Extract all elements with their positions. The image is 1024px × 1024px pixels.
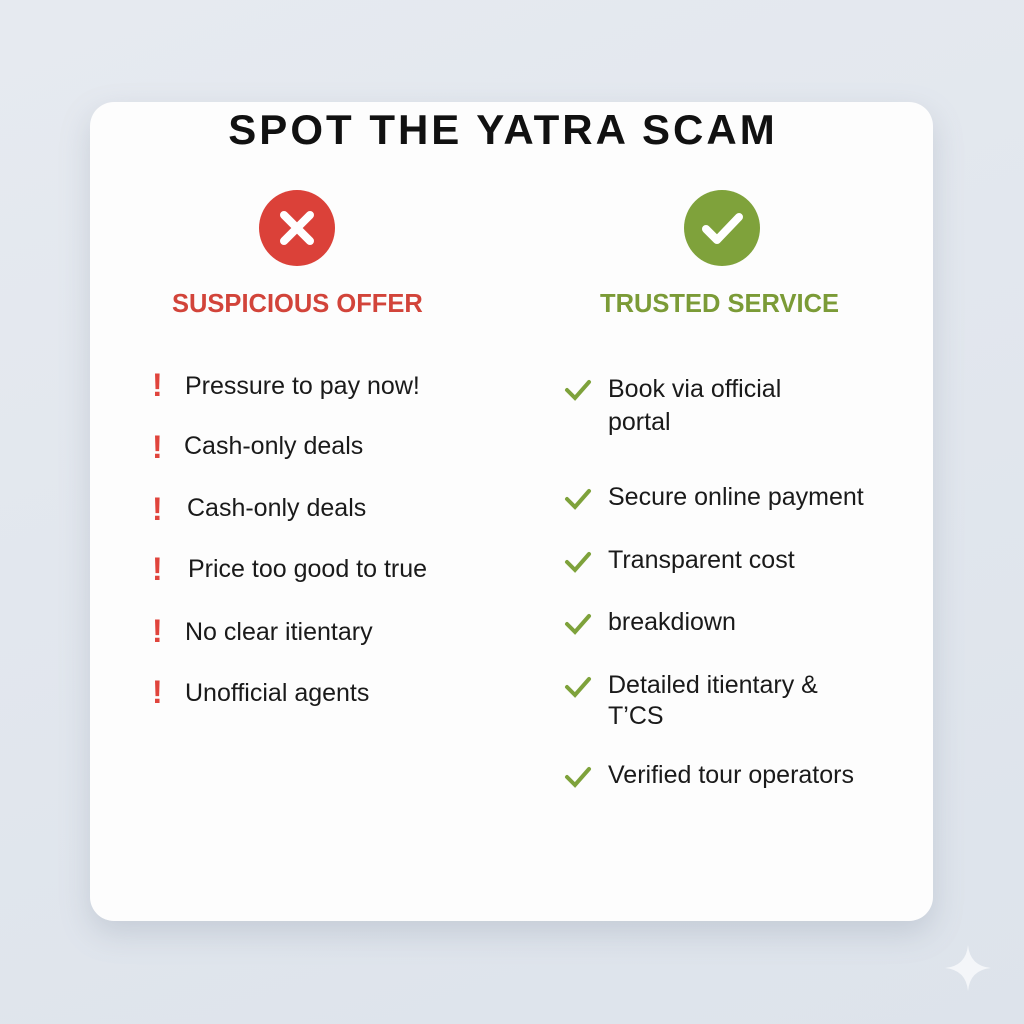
- list: trusted: Secure online payment: [608, 483, 864, 511]
- list: trusted: T’CS: [608, 702, 664, 730]
- list: suspicious: Price too good to true: [188, 555, 427, 583]
- list: suspicious: !: [152, 367, 163, 403]
- list: trusted: Detailed itientary &: [608, 671, 818, 699]
- list: trusted: Verified tour operators: [608, 761, 854, 789]
- list: suspicious: Pressure to pay now!: [185, 372, 420, 400]
- list: suspicious: !: [152, 491, 163, 527]
- list: trusted: portal: [608, 408, 671, 436]
- heading: trusted: TRUSTED SERVICE: [600, 290, 839, 318]
- list: suspicious: Unofficial agents: [185, 679, 369, 707]
- list: suspicious: !: [152, 429, 163, 465]
- icon: red x: [259, 190, 335, 266]
- icon: sparkle: [946, 946, 990, 990]
- list: trusted: Transparent cost: [608, 546, 795, 574]
- list: suspicious: [152, 367, 427, 710]
- list: suspicious: No clear itientary: [185, 618, 373, 646]
- list: suspicious: Cash-only deals: [184, 432, 363, 460]
- list: suspicious: !: [152, 613, 163, 649]
- list: suspicious: Cash-only deals: [187, 494, 366, 522]
- heading: suspicious: SUSPICIOUS OFFER: [172, 290, 423, 318]
- title: SPOT THE YATRA SCAM: [228, 106, 778, 153]
- list: trusted: breakdiown: [608, 608, 736, 636]
- icon: green check: [684, 190, 760, 266]
- list: suspicious: !: [152, 551, 163, 587]
- card: [90, 102, 933, 921]
- list: trusted: Book via official: [608, 375, 781, 403]
- list: suspicious: !: [152, 674, 163, 710]
- list: trusted: [564, 375, 864, 789]
